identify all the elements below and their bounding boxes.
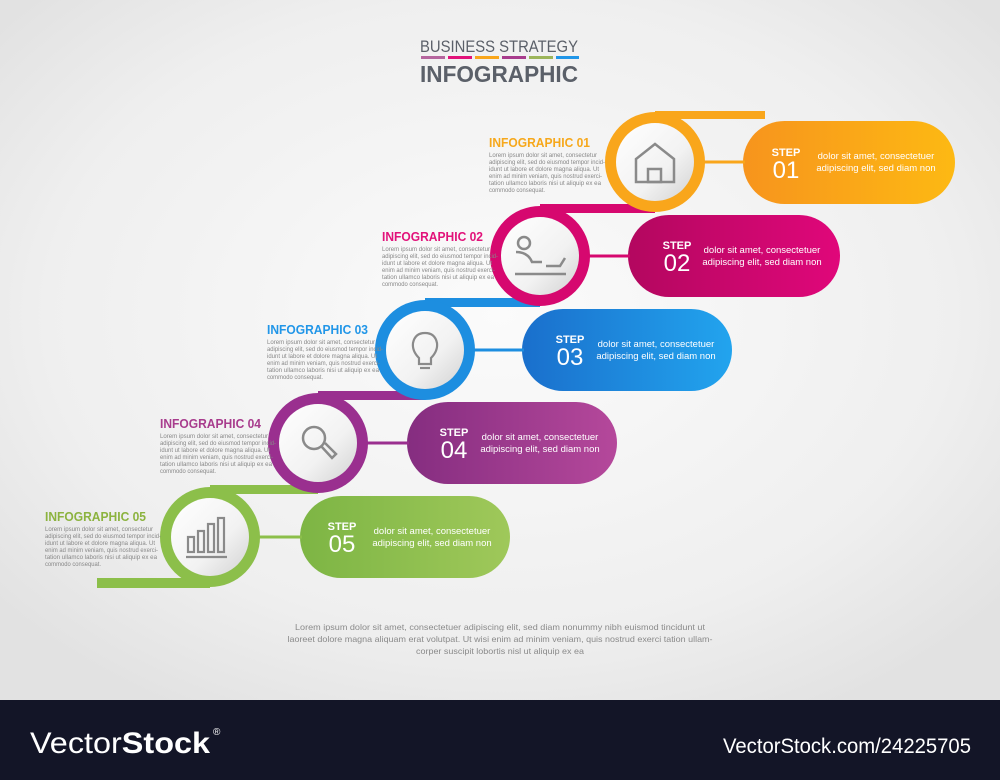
bottom paragraph: laoreet dolore magna aliquam erat volutpat. Ut wisi enim ad minim veniam, quis nostrud exerci tation ullam- [288, 634, 713, 644]
text: infographic 02: commodo consequat. [382, 282, 438, 288]
text: infographic 01: adipiscing elit, sed do eiusmod tempor incid- [489, 160, 605, 166]
text: infographic 02: tation ullamco laboris nisi ut aliquip ex ea [382, 275, 495, 281]
step 2 [490, 206, 840, 306]
step 4: dolor sit amet, consectetuer [482, 432, 598, 443]
text: infographic 03: idunt ut labore et dolore magna aliqua. Ut [267, 354, 377, 360]
step 3: 03 [557, 344, 583, 371]
step 5 [160, 487, 510, 587]
footer [0, 700, 1000, 780]
text: infographic 02: enim ad minim veniam, quis nostrud exerci- [382, 268, 495, 274]
text: infographic 03: tation ullamco laboris nisi ut aliquip ex ea [267, 368, 380, 374]
footer: ® [213, 727, 221, 738]
text: infographic 05: idunt ut labore et dolore magna aliqua. Ut [45, 541, 155, 547]
bottom paragraph: corper suscipit lobortis nisl ut aliquip ex ea [416, 646, 584, 656]
step 1 [605, 112, 955, 212]
text: infographic 01: INFOGRAPHIC 01 [489, 135, 590, 150]
step 4: STEP [440, 427, 468, 439]
step 4: 04 [441, 437, 467, 464]
text: infographic 04: Lorem ipsum dolor sit amet, consectetur [160, 434, 268, 440]
step 3: dolor sit amet, consectetuer [598, 339, 714, 350]
title [420, 37, 579, 87]
step 3: adipiscing elit, sed diam non [596, 351, 716, 362]
text: infographic 04: enim ad minim veniam, quis nostrud exerci- [160, 455, 273, 461]
step 2: STEP [663, 240, 691, 252]
title: INFOGRAPHIC [420, 61, 578, 87]
text: infographic 03: enim ad minim veniam, quis nostrud exerci- [267, 361, 380, 367]
step 3 [375, 300, 732, 400]
step 1: 01 [773, 157, 799, 184]
step 1: dolor sit amet, consectetuer [818, 151, 934, 162]
icon: light bulb [413, 333, 437, 368]
text: infographic 03: Lorem ipsum dolor sit amet, consectetur [267, 340, 375, 346]
text: infographic 02: Lorem ipsum dolor sit amet, consectetur [382, 247, 490, 253]
icon: person at laptop [515, 237, 566, 274]
text: infographic 04 [160, 416, 276, 475]
text: infographic 05: commodo consequat. [45, 562, 101, 568]
step 2: adipiscing elit, sed diam non [702, 257, 822, 268]
text: infographic 01: commodo consequat. [489, 188, 545, 194]
step 2: dolor sit amet, consectetuer [704, 245, 820, 256]
connector bars [97, 111, 765, 588]
text: infographic 02 [382, 229, 498, 288]
text: infographic 01: idunt ut labore et dolore magna aliqua. Ut [489, 167, 599, 173]
footer: VectorStock [30, 727, 210, 760]
text: infographic 03: commodo consequat. [267, 375, 323, 381]
text: infographic 03 [267, 322, 383, 381]
text: infographic 02: adipiscing elit, sed do eiusmod tempor incid- [382, 254, 498, 260]
text: infographic 05: Lorem ipsum dolor sit amet, consectetur [45, 527, 153, 533]
step 5: 05 [329, 531, 355, 558]
icon: bar chart [186, 518, 227, 557]
text: infographic 01: tation ullamco laboris nisi ut aliquip ex ea [489, 181, 602, 187]
text: infographic 04: adipiscing elit, sed do eiusmod tempor incid- [160, 441, 276, 447]
text: infographic 05: adipiscing elit, sed do eiusmod tempor incid- [45, 534, 161, 540]
text: infographic 03: INFOGRAPHIC 03 [267, 322, 368, 337]
text: infographic 05: INFOGRAPHIC 05 [45, 509, 146, 524]
step 2: 02 [664, 250, 690, 277]
text: infographic 05 [45, 509, 161, 568]
text: infographic 01 [489, 135, 605, 194]
text: infographic 02: idunt ut labore et dolore magna aliqua. Ut [382, 261, 492, 267]
title: BUSINESS STRATEGY [420, 37, 578, 56]
text: infographic 05: enim ad minim veniam, quis nostrud exerci- [45, 548, 158, 554]
text: infographic 04: idunt ut labore et dolore magna aliqua. Ut [160, 448, 270, 454]
text: infographic 04: INFOGRAPHIC 04 [160, 416, 262, 431]
bottom paragraph [288, 622, 713, 656]
text: infographic 02: INFOGRAPHIC 02 [382, 229, 483, 244]
step 5: dolor sit amet, consectetuer [374, 526, 490, 537]
icon: house [636, 144, 674, 182]
bottom paragraph: Lorem ipsum dolor sit amet, consectetuer adipiscing elit, sed diam nonummy nibh euismod tincidunt ut [295, 622, 706, 632]
text: infographic 05: tation ullamco laboris nisi ut aliquip ex ea [45, 555, 158, 561]
footer: VectorStock.com/24225705 [723, 735, 971, 758]
text: infographic 03: adipiscing elit, sed do eiusmod tempor incid- [267, 347, 383, 353]
icon: magnifier [303, 427, 336, 458]
text: infographic 01: enim ad minim veniam, quis nostrud exerci- [489, 174, 602, 180]
text: infographic 01: Lorem ipsum dolor sit amet, consectetur [489, 153, 597, 159]
step 1: STEP [772, 147, 800, 159]
text: infographic 04: tation ullamco laboris nisi ut aliquip ex ea [160, 462, 273, 468]
step 5: STEP [328, 521, 356, 533]
text: infographic 04: commodo consequat. [160, 469, 216, 475]
step 4: adipiscing elit, sed diam non [480, 444, 600, 455]
step 1: adipiscing elit, sed diam non [816, 163, 936, 174]
step 3: STEP [556, 334, 584, 346]
step 5: adipiscing elit, sed diam non [372, 538, 492, 549]
step 4 [268, 393, 617, 493]
